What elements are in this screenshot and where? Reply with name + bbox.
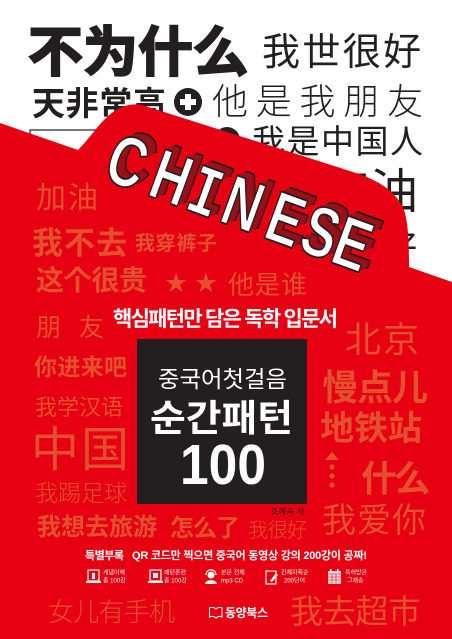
icon: headset bbox=[205, 570, 217, 584]
black handwritten phrases bbox=[28, 23, 423, 270]
phrase: wo ye hen hao: 我世很好 bbox=[262, 32, 421, 74]
label: words: 간체자획순 bbox=[281, 568, 309, 576]
phrase: zhe ge hen gui: 这个很贵 bbox=[36, 265, 147, 296]
bonus headline bbox=[85, 549, 367, 562]
icon: lecture screen bbox=[86, 570, 101, 583]
label: mp3: 본문 전체 bbox=[221, 568, 245, 576]
label: study plan bbox=[345, 568, 368, 584]
phrase: ta shi shei: 他是谁 bbox=[228, 270, 307, 300]
icon: note and pencil bbox=[266, 571, 278, 584]
phrase: bei jing: 北京 bbox=[345, 319, 419, 360]
label: practice lecture bbox=[164, 568, 187, 584]
phrase: wo ai ni: 我爱你 bbox=[322, 502, 426, 540]
icon: calendar bbox=[328, 569, 341, 584]
author: 조혜숙 저 bbox=[271, 507, 304, 516]
phrase: tian fei chang gao: 天非常高 bbox=[32, 85, 166, 122]
icon: open book bbox=[210, 607, 222, 618]
phrase: jia you: 加油 bbox=[322, 166, 418, 219]
phrase: man dian er: 慢点儿 bbox=[322, 367, 428, 408]
icon: practice screen bbox=[148, 570, 163, 583]
faded red phrases bbox=[31, 182, 430, 630]
label: mp3 bbox=[221, 568, 245, 584]
bonus label: 특별부록 bbox=[85, 549, 124, 562]
icon: arrow with dots bbox=[325, 452, 339, 488]
publisher logo bbox=[210, 606, 268, 620]
phrase: di tie zhan: 地铁站 bbox=[320, 410, 422, 448]
phrase: zen me le: 怎么了 bbox=[170, 515, 240, 542]
phrase: nv er you shou ji: 女儿有手机 bbox=[48, 597, 175, 627]
phrase: jia you: 加油 bbox=[36, 182, 98, 215]
label: concept lecture: 총 100강 bbox=[103, 576, 126, 584]
phrase: wo qu chao shi: 我去超市 bbox=[290, 593, 421, 630]
label: study plan: 특허받은 bbox=[345, 568, 368, 576]
partial character behind the red panel: 好 bbox=[381, 229, 417, 270]
phrase: wo xue han yu: 我学汉语 bbox=[35, 395, 123, 420]
label: study plan: 그재송 bbox=[347, 576, 364, 584]
series title: 중국어첫걸음 bbox=[158, 366, 287, 392]
label: words bbox=[281, 568, 309, 584]
phrase: zhong guo: 中国 bbox=[31, 424, 129, 477]
phrase: ta shi wo peng you: 他是我朋友 bbox=[212, 81, 423, 122]
publisher name: 동양북스 bbox=[225, 606, 268, 620]
panel: black title box bbox=[137, 339, 307, 504]
label: practice lecture: 패턴훈련 bbox=[164, 568, 186, 576]
title art: CHINESE: CHINESE bbox=[100, 116, 389, 291]
label: concept lecture: 개념이해 bbox=[103, 568, 125, 576]
subtitle: 핵심패턴만 담은 독학 입문서 bbox=[113, 308, 338, 331]
phrase: wo bu qu: 我不去 bbox=[32, 226, 127, 261]
phrase: wo ti zu qiu: 我踢足球 bbox=[35, 480, 127, 506]
bonus items row bbox=[86, 568, 368, 584]
phrase: bu wei shen me: 不为什么 bbox=[28, 23, 248, 83]
title art: CHINESE: CHINESE bbox=[97, 117, 386, 292]
phrase: wo shi zhong guo ren: 我是中国人 bbox=[252, 123, 423, 160]
title art: CHINESE: CHINESE bbox=[94, 118, 383, 293]
phrase: ni jin lai ba: 你进来吧 bbox=[34, 354, 127, 380]
title art: CHINESE: CHINESE bbox=[103, 114, 392, 289]
label: mp3: mp3 CD bbox=[221, 578, 244, 584]
partial circle behind the red panel bbox=[214, 127, 240, 153]
phrase: peng you: 朋友 bbox=[36, 314, 104, 342]
label: practice lecture: 총 100강 bbox=[164, 576, 187, 584]
phrase: wo chuan ku zi: 我穿裤子 bbox=[135, 232, 217, 255]
bonus description: QR 코드만 찍으면 중국어 동영상 강의 200강이 공짜! bbox=[132, 549, 367, 562]
phrase: wo hen hao: 我很好 bbox=[248, 519, 307, 542]
icon: two stars: ★★ bbox=[164, 268, 218, 299]
phrase: wo xiang qu lv you: 我想去旅游 bbox=[37, 514, 157, 541]
speech box behind the red panel bbox=[30, 130, 110, 170]
number 100: 100 bbox=[180, 433, 266, 497]
icon: plus circle bbox=[174, 88, 202, 116]
main title: 순간패턴 bbox=[150, 398, 293, 439]
label: words: 200단어 bbox=[284, 576, 305, 584]
label: concept lecture bbox=[103, 568, 126, 584]
phrase: shen me: 什么 bbox=[361, 458, 430, 499]
